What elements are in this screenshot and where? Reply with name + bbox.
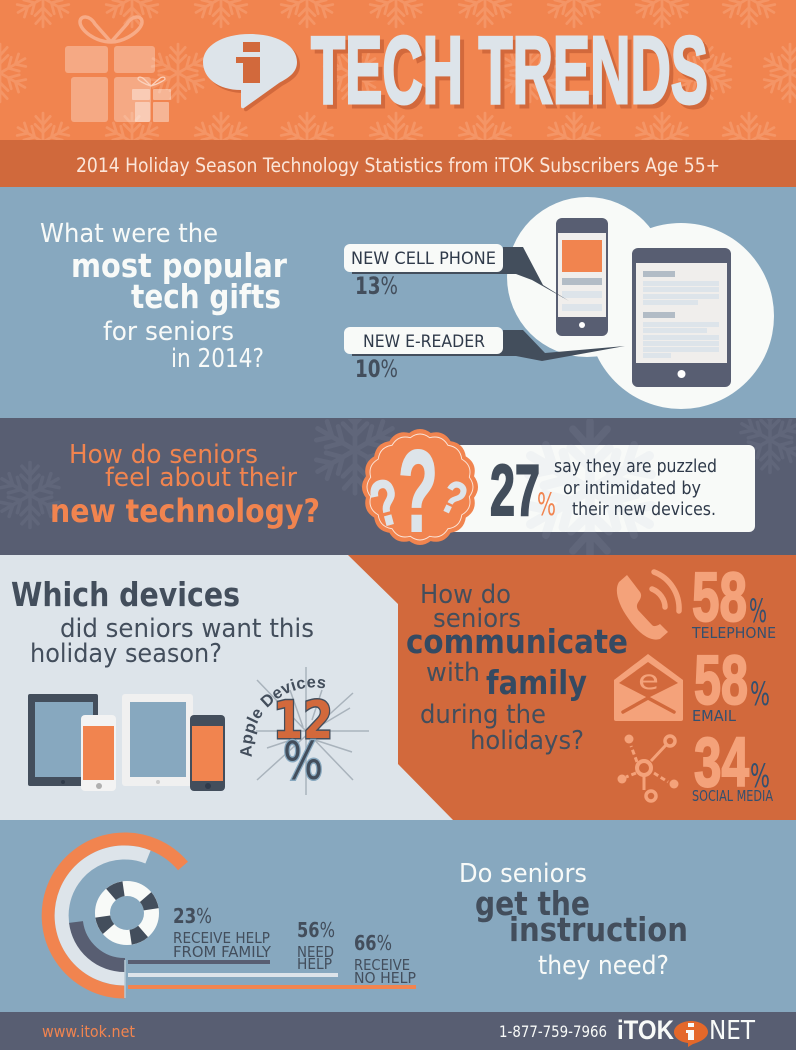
statistic: apple devices 12%: %: [283, 732, 323, 792]
statistic: telephone: %: [749, 592, 767, 630]
statistic card: [454, 445, 755, 532]
phone number: 1-877-759-7966: [499, 1022, 607, 1041]
heading: feelings question: [50, 440, 320, 530]
icon: gift boxes: [65, 17, 171, 122]
heading: devices question: did seniors want this: [60, 614, 314, 644]
heading: feelings question: How do seniors: [69, 440, 258, 470]
callout: new cell phone: NEW CELL PHONE: [351, 249, 496, 269]
logo: iTOK.NET: [617, 1015, 755, 1047]
heading: devices question: [11, 575, 314, 669]
logo: iTOK.NET: NET: [709, 1016, 755, 1046]
website link: www.itok.net: [42, 1022, 135, 1041]
statistic: email: [614, 641, 770, 725]
panel: communication with family: [348, 555, 796, 820]
icon: dark phone: [190, 715, 225, 791]
icon: tablet: [632, 248, 731, 387]
statistic card: 27: [490, 451, 540, 531]
statistic card: or intimidated by: [563, 479, 701, 499]
heading: communication question: holidays?: [470, 726, 584, 756]
panel: header: [0, 0, 796, 140]
text: 66% receive no help: 66%: [354, 931, 392, 955]
icon: question mark badge: ?: [398, 426, 438, 556]
text: 56% need help: 56%: [297, 918, 335, 942]
text: 56% need help: HELP: [297, 955, 332, 973]
statistic: email: EMAIL: [692, 707, 737, 725]
panel: popular tech gifts: [0, 187, 796, 418]
statistic: email: %: [750, 675, 770, 713]
text: 23% receive help from family: [173, 904, 272, 961]
heading: devices question: Which devices: [11, 575, 240, 614]
heading: feelings question: new technology?: [50, 492, 320, 530]
icon: lifebuoy: [94, 880, 160, 946]
statistic: social media: %: [750, 757, 770, 795]
panel: footer: [0, 1012, 796, 1050]
heading: communication question: seniors: [433, 604, 521, 634]
statistic: telephone: 58: [692, 558, 747, 636]
heading: popular gifts question: What were the: [40, 219, 218, 249]
heading: popular gifts question: tech gifts: [131, 277, 281, 316]
statistic: apple devices 12%: 12: [273, 691, 333, 751]
logo: iTOK.NET: iTOK: [617, 1015, 674, 1045]
statistic: telephone: [617, 558, 776, 642]
icon: phone: [556, 218, 608, 336]
heading: popular gifts question: for seniors: [103, 317, 234, 347]
statistic: email: 58: [694, 641, 748, 719]
text: 23% receive help from family: FROM FAMILY: [173, 943, 272, 961]
heading: feelings question: feel about their: [105, 463, 297, 493]
statistic card: say they are puzzled: [554, 457, 717, 477]
panel: devices wanted: [0, 555, 453, 820]
icon: question mark badge: ?: [433, 469, 475, 526]
icon: white tablet: [122, 694, 193, 786]
statistic: social media: 34: [694, 723, 749, 801]
icon: white phone: [81, 715, 116, 791]
callout: new e-reader: NEW E-READER: [363, 332, 485, 352]
heading: instruction question: instruction: [509, 910, 688, 949]
statistic: social media: [618, 723, 774, 805]
icon: white circles: [507, 197, 774, 409]
text: 56% need help: NEED: [297, 943, 334, 961]
panel: subtitle band: [0, 140, 796, 187]
icon: dark tablet: [28, 694, 98, 786]
heading: communication question: How do: [420, 580, 511, 610]
callout: new e-reader: 10%: [355, 355, 398, 383]
statistic: email: e: [638, 665, 659, 696]
statistic: telephone: TELEPHONE: [691, 624, 776, 642]
text: 66% receive no help: NO HELP: [354, 969, 416, 987]
heading: instruction question: get the: [475, 884, 590, 923]
heading: popular gifts question: most popular: [71, 246, 288, 285]
heading: communication question: with: [426, 658, 480, 688]
icon: speech bubble logo: [203, 34, 300, 111]
text: 23% receive help from family: RECEIVE HELP: [173, 929, 270, 947]
heading: communication question: during the: [420, 700, 546, 730]
statistic: apple devices 12%: [240, 667, 369, 795]
text: 66% receive no help: [354, 931, 416, 987]
panel: feelings about technology: [0, 407, 796, 558]
statistic card: their new devices.: [572, 500, 716, 520]
heading: communication question: family: [486, 663, 587, 702]
heading: communication question: communicate: [406, 622, 628, 661]
callout: new cell phone: 13%: [355, 272, 398, 300]
heading: instruction question: [459, 859, 688, 981]
text: 66% receive no help: RECEIVE: [354, 956, 410, 974]
icon: question mark badge: [363, 426, 477, 556]
chart: radial help bars: [48, 839, 416, 998]
text: 23% receive help from family: 23%: [173, 904, 212, 928]
icon: question mark badge: ?: [363, 465, 408, 541]
callout: new cell phone: [344, 244, 569, 301]
statistic card: %: [537, 487, 556, 523]
statistic: apple devices 12%: Apple Devices: [240, 678, 326, 757]
heading: popular gifts question: in 2014?: [171, 344, 264, 374]
text: 56% need help: [297, 918, 335, 973]
heading: instruction question: they need?: [538, 951, 669, 981]
heading: devices question: holiday season?: [30, 639, 222, 669]
panel: subtitle band: 2014 Holiday Season Technology Statistics from iTOK Subscribers Age 55+: [76, 154, 720, 177]
callout: new e-reader: [344, 327, 625, 383]
heading: communication question: [406, 580, 628, 756]
heading: popular gifts question: [40, 219, 288, 374]
heading: instruction question: Do seniors: [459, 859, 587, 889]
panel: instruction: [0, 820, 796, 1012]
